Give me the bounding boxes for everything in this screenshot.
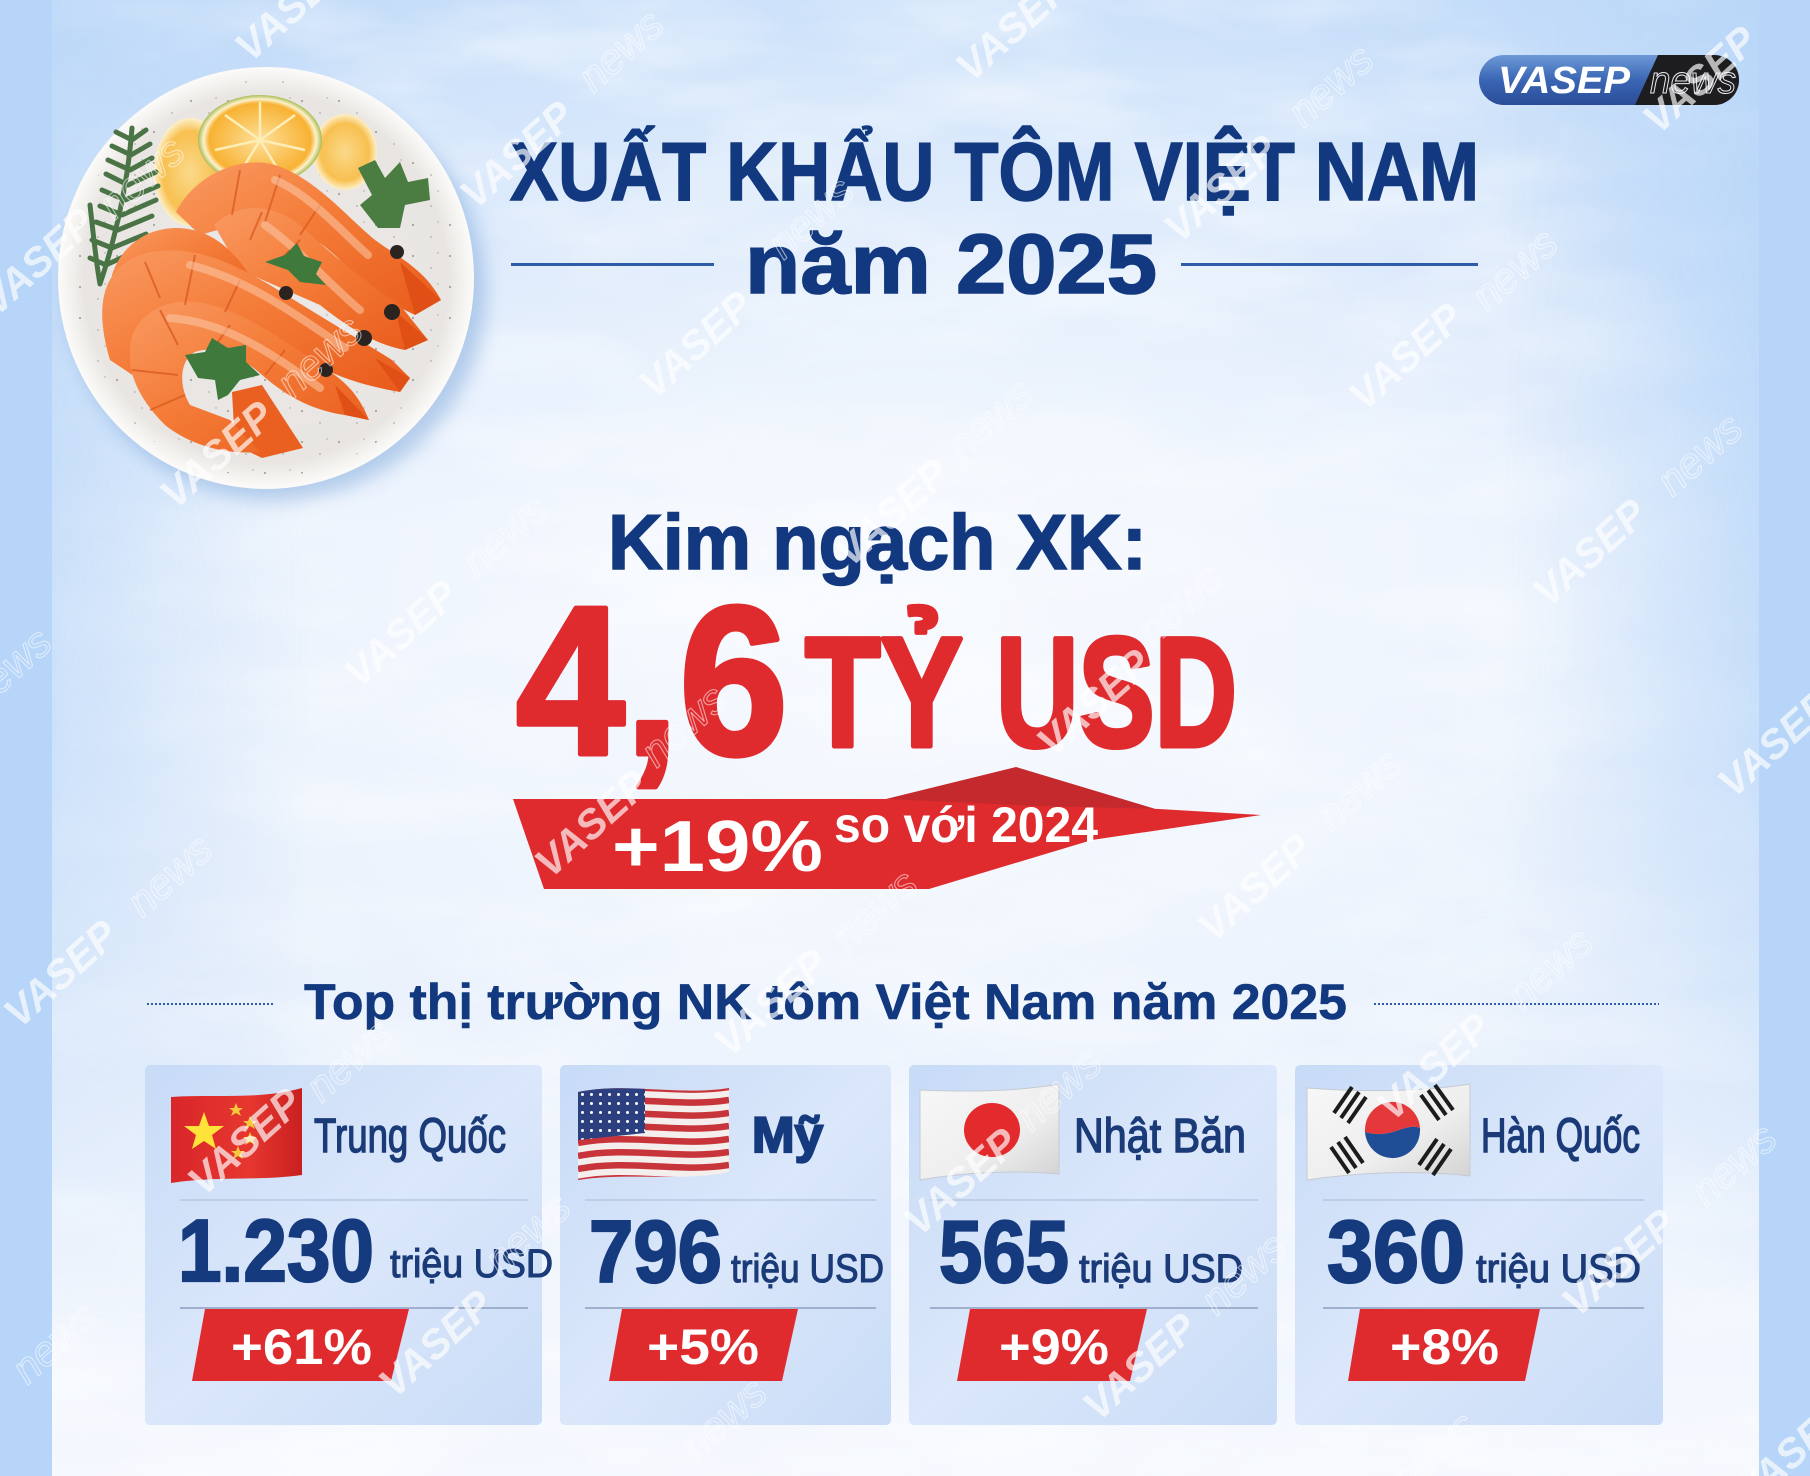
card: Trung Quốc: triệu USD — [390, 1242, 553, 1286]
watermarks: VASEP — [826, 450, 958, 575]
card: Mỹ: 796 — [589, 1202, 722, 1301]
badge +5% — [609, 1309, 798, 1381]
card: Nhật Băn: triệu USD — [1079, 1247, 1243, 1291]
growth ribbon: +19% so với 2024 — [513, 767, 1261, 889]
watermarks: VASEP — [1553, 1200, 1685, 1325]
card: Trung Quốc: Trung Quốc — [314, 1110, 506, 1163]
badge +8%: +8% — [1390, 1319, 1499, 1375]
logo: VASEP news: news — [1650, 60, 1736, 102]
watermarks: news — [296, 1010, 400, 1110]
badge +61%: +61% — [231, 1319, 372, 1375]
flag: China — [171, 1088, 302, 1183]
watermarks: VASEP — [1189, 825, 1321, 950]
logo: VASEP news — [1479, 55, 1739, 105]
watermarks: news — [822, 860, 926, 960]
card: Nhật Băn: Nhật Băn — [1074, 1110, 1246, 1163]
watermarks: VASEP — [1340, 294, 1472, 419]
watermarks: news — [1647, 404, 1751, 504]
watermarks: news — [631, 675, 735, 775]
watermarks: news — [1191, 1223, 1295, 1323]
card: Nhật Băn: 565 — [939, 1202, 1069, 1301]
card: Mỹ: Mỹ — [752, 1107, 823, 1163]
watermarks: news — [1681, 1114, 1785, 1214]
watermarks: news — [117, 825, 221, 925]
watermarks: VASEP — [179, 1079, 311, 1204]
watermarks: news — [1278, 35, 1382, 135]
watermarks: news — [89, 127, 193, 227]
watermarks: VASEP — [451, 92, 583, 217]
watermarks: news — [1306, 739, 1410, 839]
illustration: plate of shrimp — [59, 68, 486, 500]
watermarks: VASEP — [630, 282, 762, 407]
watermarks: VASEP — [1155, 126, 1287, 251]
flag: USA — [578, 1088, 729, 1180]
watermarks: VASEP — [526, 761, 658, 886]
watermarks: news — [452, 485, 556, 585]
watermarks: news — [671, 1368, 775, 1468]
title — [510, 124, 1479, 311]
watermarks: news — [475, 1183, 579, 1283]
card: Mỹ: triệu USD — [731, 1247, 884, 1291]
headline figure: export value — [516, 498, 1237, 799]
watermarks: news — [1497, 918, 1601, 1018]
shrimp back — [102, 162, 441, 392]
watermarks: VASEP — [370, 1281, 502, 1406]
watermarks: news — [1006, 1039, 1110, 1139]
watermarks: VASEP — [1634, 17, 1766, 142]
headline figure: export value: Kim ngạch XK: — [608, 498, 1147, 586]
herbs — [90, 128, 430, 284]
badge +5%: +5% — [647, 1319, 759, 1375]
card: Hàn Quốc — [1295, 1065, 1663, 1425]
card: Hàn Quốc: 360 — [1327, 1202, 1465, 1301]
card: Hàn Quốc: Hàn Quốc — [1481, 1110, 1640, 1163]
watermarks: news — [758, 167, 862, 267]
parsley garnish — [185, 243, 326, 400]
watermarks: VASEP — [1524, 490, 1656, 615]
flag: South Korea — [1307, 1084, 1470, 1180]
card: Hàn Quốc: triệu USD — [1476, 1247, 1641, 1291]
watermarks: VASEP — [895, 1119, 1027, 1244]
card: Nhật Băn — [909, 1065, 1277, 1425]
badge +8% — [1348, 1309, 1540, 1381]
watermarks: VASEP — [1074, 1304, 1206, 1429]
logo: VASEP news: VASEP — [1498, 60, 1631, 102]
badge +9% — [957, 1309, 1147, 1381]
badge +9%: +9% — [999, 1319, 1109, 1375]
headline figure: export value: TỶ — [805, 606, 963, 780]
headline figure: export value: USD — [996, 606, 1237, 780]
shrimp front — [130, 170, 441, 458]
watermarks: news — [1462, 219, 1566, 319]
watermarks: VASEP — [151, 392, 283, 517]
card: Trung Quốc: 1.230 — [178, 1201, 374, 1300]
lemon slices — [154, 95, 377, 226]
watermarks: news — [267, 306, 371, 406]
watermarks: VASEP — [1368, 1004, 1500, 1129]
watermarks: VASEP — [705, 940, 837, 1065]
watermarks: news — [2, 1292, 106, 1392]
watermarks: news — [1127, 554, 1231, 654]
badge +61% — [192, 1309, 409, 1381]
headline figure: export value: 4,6 — [516, 562, 788, 799]
flag: Japan — [920, 1084, 1059, 1180]
watermarks: VASEP — [335, 571, 467, 696]
growth ribbon: +19% so với 2024: +19% — [612, 807, 823, 887]
title: XUẤT KHẨU TÔM VIỆT NAM — [510, 124, 1479, 218]
growth ribbon: +19% so với 2024: so với 2024 — [834, 797, 1098, 853]
section heading: top markets: Top thị trường NK tôm Việt Nam năm 2025 — [304, 974, 1347, 1030]
card: Mỹ — [560, 1065, 891, 1425]
card: Trung Quốc — [145, 1065, 553, 1425]
watermarks: news — [568, 0, 672, 100]
watermarks: VASEP — [1028, 640, 1160, 765]
title: năm 2025 — [745, 217, 1157, 311]
watermarks: news — [937, 369, 1041, 469]
